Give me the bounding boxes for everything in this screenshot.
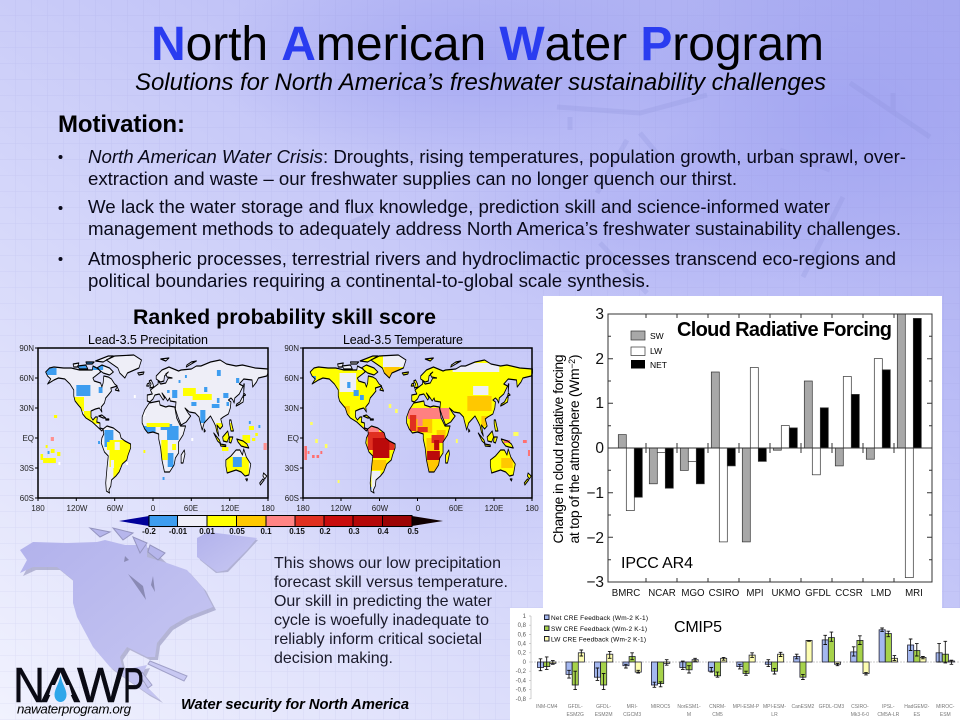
y axis title: Change in cloud radiative forcing (550, 354, 566, 544)
CMIP5 model names: LR (771, 712, 778, 718)
model names (612, 588, 923, 599)
CMIP5 y axis: -0,4 (516, 678, 527, 684)
CMIP5 model names: HadGEM2- (904, 704, 930, 710)
explanatory paragraph: reliably inform critical societal (274, 631, 482, 648)
NAWP logo (13, 659, 144, 716)
explanatory paragraph: cycle is woefully inadequate to (274, 612, 489, 629)
map: precipitation skill: 180 (31, 504, 45, 513)
model names: MRI (905, 588, 923, 599)
map: precipitation skill: Lead-3.5 Precipitation (88, 333, 208, 347)
CMIP5 y axis: 0 (523, 660, 527, 666)
y axis numbers: −1 (586, 485, 604, 502)
map: temperature skill: 0 (416, 504, 421, 513)
model names: UKMO (771, 588, 801, 599)
explanatory paragraph: decision making. (274, 650, 393, 667)
legend: NET (650, 360, 667, 370)
website: nawaterprogram.org (17, 702, 132, 716)
colour scale legend: 0.2 (319, 527, 331, 536)
map: temperature skill: 60S (285, 494, 299, 503)
y axis numbers: −2 (586, 530, 604, 547)
map: temperature skill: 60N (284, 374, 299, 383)
CMIP5 y axis: -0,2 (516, 669, 527, 675)
CMIP5 model names: INM-CM4 (536, 704, 558, 710)
CMIP5 y axis: 0,4 (518, 642, 527, 648)
NAWP logo: P (123, 659, 144, 713)
map: precipitation skill: 30S (20, 464, 34, 473)
model names: LMD (871, 588, 891, 599)
CMIP5 model names: CSIRO- (851, 704, 869, 710)
NAWP logo: A (41, 659, 80, 713)
CMIP5 legend: LW CRE Feedback (Wm-2 K-1) (551, 636, 646, 644)
motivation bullet list: North American Water Crisis: Droughts, rising temperatures, population growth, urban sprawl, over- (88, 146, 906, 167)
CMIP5 model names: ESM2G (566, 712, 584, 718)
CMIP5 model names: MIROC5 (651, 704, 671, 710)
map: temperature skill: EQ (287, 434, 299, 443)
colour scale legend: 0.4 (377, 527, 389, 536)
chart title: Cloud Radiative Forcing (677, 319, 892, 341)
legend (631, 331, 667, 370)
motivation bullet list: extraction and waste – our freshwater supplies can no longer quench our thirst. (88, 168, 737, 189)
map: temperature skill: 60E (449, 504, 463, 513)
map: precipitation skill: 60E (184, 504, 198, 513)
map: temperature skill (284, 333, 539, 513)
CMIP5 model names: CGCM3 (623, 712, 641, 718)
heading: motivation: Motivation: (58, 111, 185, 138)
model names: NCAR (648, 588, 676, 599)
explanatory paragraph: Our skill in predicting the water (274, 593, 493, 610)
CMIP5 legend (544, 615, 648, 644)
subtitle: Solutions for North America’s freshwater sustainability challenges (135, 69, 826, 96)
y axis numbers: 2 (595, 351, 604, 368)
title: North American Water Program (151, 18, 824, 71)
colour scale legend (119, 516, 443, 536)
colour scale legend: 0.5 (407, 527, 419, 536)
y axis numbers: −3 (586, 574, 604, 591)
map: precipitation skill: 30N (19, 404, 34, 413)
colour scale legend: -0.2 (142, 527, 156, 536)
model names: MGO (681, 588, 705, 599)
CMIP5 y axis: 0,6 (518, 632, 527, 638)
colour scale legend: -0.01 (169, 527, 188, 536)
source label: IPCC AR4: IPCC AR4 (621, 555, 693, 572)
map: temperature skill: 30S (285, 464, 299, 473)
model names: CCSR (835, 588, 863, 599)
map: precipitation skill: 60W (107, 504, 124, 513)
map: precipitation skill: 60S (20, 494, 34, 503)
y axis numbers: 1 (595, 395, 604, 412)
map: temperature skill: 60W (372, 504, 389, 513)
CMIP5 model names: IPSL- (882, 704, 895, 710)
map: temperature skill: 120E (485, 504, 503, 513)
NAWP logo: W (77, 659, 125, 713)
model names: BMRC (612, 588, 640, 599)
y axis numbers (586, 306, 604, 591)
y axis title: ) (566, 354, 582, 359)
CMIP5 model names: ES (913, 712, 921, 718)
CMIP5 model names: Mk3-6-0 (851, 712, 869, 718)
map: precipitation skill: EQ (22, 434, 34, 443)
CMIP5 model names: GFDL- (568, 704, 583, 710)
CMIP5 model names: MIROC- (936, 704, 955, 710)
motivation bullet list: We lack the water storage and flux knowledge, prediction skill and science-informed water (88, 196, 830, 217)
CMIP5 model names: CM5A-LR (877, 712, 900, 718)
explanatory paragraph: forecast skill versus temperature. (274, 574, 508, 591)
panel: cloud radiative forcing chart (543, 296, 942, 609)
colour scale legend: 0.1 (260, 527, 272, 536)
model names: MPI (746, 588, 764, 599)
CMIP5 legend: Net CRE Feedback (Wm-2 K-1) (551, 615, 648, 622)
watermark map of North America (20, 528, 258, 703)
y axis numbers: 3 (595, 306, 604, 323)
motivation bullet list (58, 146, 906, 291)
icon: water drop (54, 675, 66, 702)
model names: GFDL (805, 588, 832, 599)
CMIP5 error bars (539, 628, 953, 690)
map: temperature skill: 120W (331, 504, 352, 513)
explanatory paragraph: This shows our low precipitation (274, 555, 501, 572)
panel: CMIP5 feedback chart (510, 608, 960, 720)
colour scale legend: 0.05 (229, 527, 245, 536)
CMIP5 bars (538, 630, 954, 685)
NAWP logo: N (13, 659, 45, 713)
motivation bullet list: Atmospheric processes, terrestrial rivers and hydroclimactic processes transcend eco-regions and (88, 248, 896, 269)
CMIP5 model names: MPI-ESM-P (733, 704, 760, 710)
motivation bullet list: political boundaries requiring a continental-to-global scale synthesis. (88, 270, 650, 291)
map: precipitation skill: 120E (221, 504, 239, 513)
map: precipitation skill: 90N (19, 344, 34, 353)
CMIP5 model names: GFDL-CM3 (819, 704, 844, 710)
CMIP5 model names: CM5 (712, 712, 723, 718)
CMIP5 model names: MPI-ESM- (763, 704, 786, 710)
y axis numbers: 0 (595, 440, 604, 457)
y axis title: at top of the atmosphere (Wm (566, 368, 582, 544)
map: precipitation skill: 120W (67, 504, 88, 513)
legend: SW (650, 331, 664, 341)
CMIP5 y axis: 1 (523, 614, 527, 620)
heading: ranked probability skill score: Ranked probability skill score (133, 305, 436, 329)
map: precipitation skill (19, 333, 275, 513)
CMIP5 y axis: -0,8 (516, 697, 527, 703)
CMIP5 y axis (516, 614, 531, 703)
y axis title (550, 354, 582, 544)
map: precipitation skill: 60N (19, 374, 34, 383)
colour scale legend: 0.01 (199, 527, 215, 536)
colour scale legend: 0.3 (348, 527, 360, 536)
CMIP5 model names: MRI- (627, 704, 638, 710)
CMIP5 model names: NorESM1- (677, 704, 701, 710)
CMIP5 model names: ESM2M (595, 712, 612, 718)
map: temperature skill: Lead-3.5 Temperature (343, 333, 463, 347)
map: temperature skill: 30N (284, 404, 299, 413)
CMIP5 label: CMIP5 (674, 619, 722, 636)
map: temperature skill: 90N (284, 344, 299, 353)
CMIP5 model names: GFDL- (596, 704, 611, 710)
colour scale legend: 0.15 (289, 527, 305, 536)
CMIP5 y axis: -0,6 (516, 688, 527, 694)
tagline: Water security for North America (181, 697, 409, 713)
CMIP5 legend: SW CRE Feedback (Wm-2 K-1) (551, 626, 647, 633)
map: temperature skill: 180 (525, 504, 539, 513)
legend: LW (650, 346, 662, 356)
CMIP5 y axis: 0,2 (518, 650, 527, 656)
map: precipitation skill: 0 (151, 504, 156, 513)
CMIP5 y axis: 0,8 (518, 623, 527, 629)
bars (618, 314, 921, 578)
y axis title: −2 (567, 359, 577, 369)
model names: CSIRO (709, 588, 740, 599)
explanatory paragraph (274, 555, 508, 667)
CMIP5 model names: CNRM- (709, 704, 726, 710)
CMIP5 model names: ESM (940, 712, 951, 718)
map: precipitation skill: 180 (261, 504, 275, 513)
CMIP5 model names (536, 704, 955, 718)
motivation bullet list: management methods to adequately address North America’s freshwater sustainability challenges. (88, 218, 901, 239)
CMIP5 model names: M (687, 712, 691, 718)
CMIP5 model names: CanESM2 (792, 704, 815, 710)
map: temperature skill: 180 (296, 504, 310, 513)
